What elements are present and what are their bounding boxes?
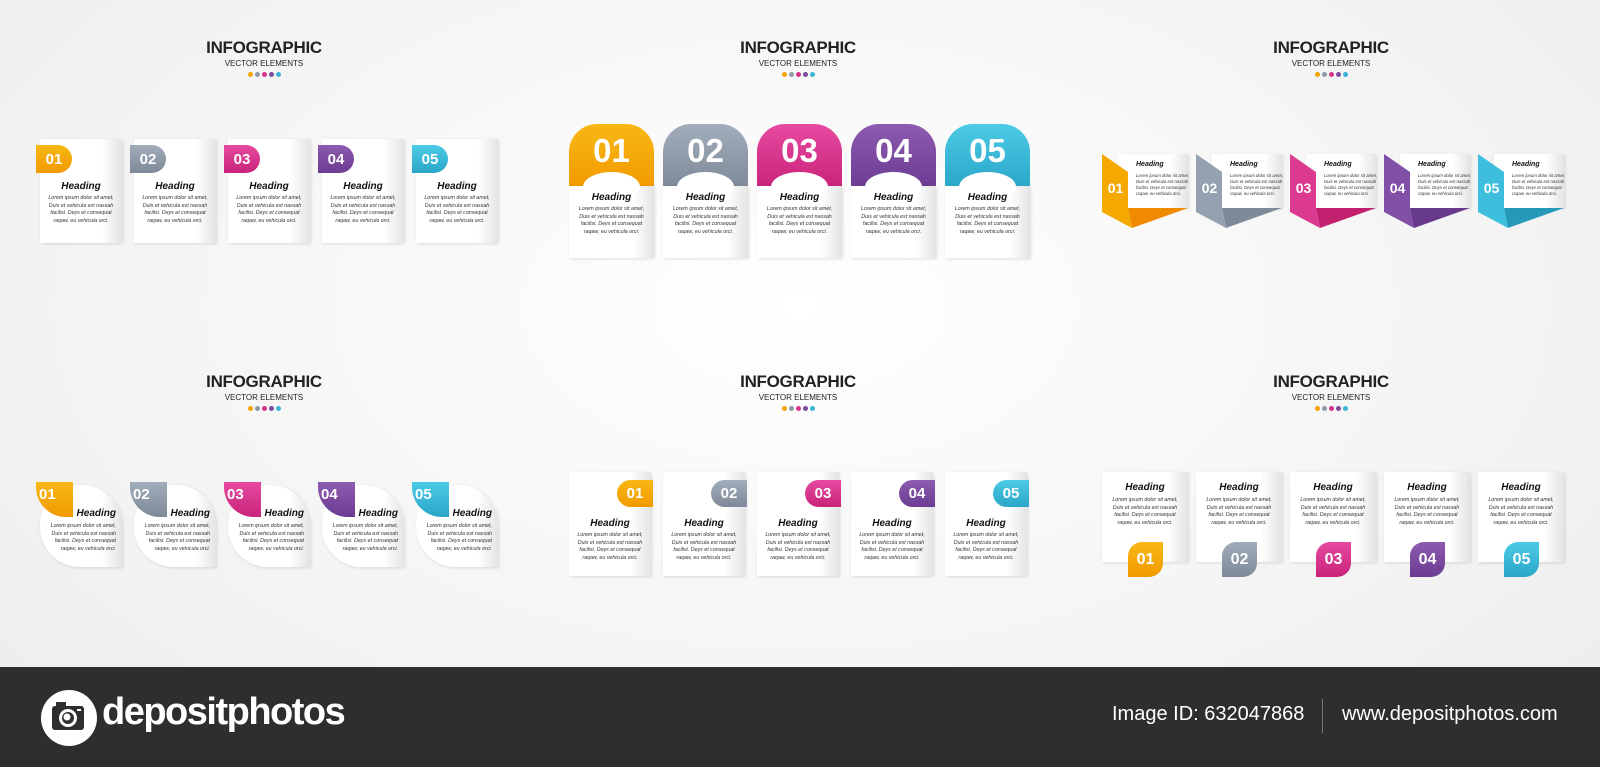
card 02 [134, 139, 216, 243]
card 03: facilisi. Deys et consequat [243, 538, 304, 544]
card 02 [664, 472, 747, 578]
card 01: Lorem ipsum dolor sit amet, [51, 523, 116, 529]
card 02: facilisi. Deys et consequat [149, 538, 210, 544]
title: panel 1: VECTOR ELEMENTS [225, 59, 303, 68]
card 02: Heading [171, 508, 210, 519]
card 04 [1384, 154, 1472, 228]
card 02: 02 [687, 132, 724, 169]
card 03: 03 [1325, 550, 1342, 568]
card 05 [1478, 472, 1566, 577]
card 01: facilisi. Deys et consequat [1114, 512, 1176, 518]
card 04: Duis et vehicula est nassah [1418, 179, 1470, 184]
card 05 [412, 482, 500, 569]
card 02: Heading [155, 181, 195, 192]
card 03: Heading [265, 508, 304, 519]
card 02: Duis et vehicula est nassah [673, 214, 738, 220]
panel 6: cards with bottom leaf badges [1102, 472, 1566, 577]
card 03: facilisi. Deys et consequat [769, 221, 830, 227]
card 02: facilisi. Deys et consequat [144, 210, 206, 216]
card 04: Duis et vehicula est nassah [334, 530, 398, 536]
icon: camera logo [41, 690, 97, 746]
card 05: facilisi. Deys et consequat [426, 210, 488, 216]
tab 01: 01 [46, 150, 62, 168]
tab 03: 03 [234, 150, 250, 168]
card 02: Lorem ipsum dolor sit amet, [142, 195, 208, 201]
card 03: Heading [1313, 482, 1353, 493]
card 01: facilisi. Deys et consequat [55, 538, 116, 544]
card 05: raqaw, eu vehicula orci. [437, 546, 492, 552]
title: panel 1: INFOGRAPHIC [206, 38, 322, 57]
card 05: facilisi. Deys et consequat [1512, 185, 1562, 190]
card 02: Duis et vehicula est nassah [1207, 504, 1271, 510]
card 03: Lorem ipsum dolor sit amet, [239, 523, 304, 529]
card 04: raqaw, eu vehicula orci. [864, 554, 920, 560]
card 02: 02 [1231, 550, 1248, 568]
card 02: raqaw, eu vehicula orci. [1230, 191, 1275, 196]
card 04: raqaw, eu vehicula orci. [335, 218, 391, 224]
card 04: raqaw, eu vehicula orci. [1399, 520, 1455, 526]
card 05: Duis et vehicula est nassah [1512, 179, 1564, 184]
card 05: 05 [1484, 180, 1499, 196]
card 02: Duis et vehicula est nassah [1230, 179, 1282, 184]
card 05: Lorem ipsum dolor sit amet, [955, 206, 1020, 212]
card 04: Heading [1407, 482, 1447, 493]
panel 2: dome cards [569, 124, 1032, 260]
card 04: Heading [1418, 161, 1446, 168]
card 04: facilisi. Deys et consequat [1396, 512, 1458, 518]
card 03: Lorem ipsum dolor sit amet, [1300, 497, 1366, 503]
card 04 [1384, 472, 1472, 577]
card 03: raqaw, eu vehicula orci. [241, 218, 297, 224]
card 01: raqaw, eu vehicula orci. [61, 546, 116, 552]
card 02: 02 [1202, 180, 1217, 196]
card 04: raqaw, eu vehicula orci. [866, 228, 921, 234]
card 03: raqaw, eu vehicula orci. [249, 546, 304, 552]
card 04: Lorem ipsum dolor sit amet, [330, 195, 396, 201]
title: panel 6: VECTOR ELEMENTS [1292, 393, 1370, 402]
card 01: Lorem ipsum dolor sit amet, [579, 206, 644, 212]
card 03: Lorem ipsum dolor sit amet, [765, 532, 831, 538]
card 02: Lorem ipsum dolor sit amet, [1206, 497, 1272, 503]
card 02: raqaw, eu vehicula orci. [1211, 520, 1267, 526]
card 05: Duis et vehicula est nassah [425, 202, 489, 208]
card 01: Duis et vehicula est nassah [578, 540, 642, 546]
card 02: Heading [684, 518, 724, 529]
card 04: Lorem ipsum dolor sit amet, [861, 206, 926, 212]
card 04: Heading [343, 181, 383, 192]
card 03: Duis et vehicula est nassah [237, 202, 301, 208]
title: panel 4: VECTOR ELEMENTS [225, 393, 303, 402]
tab 05: 05 [422, 150, 438, 168]
panel 4: rounded cards with corner flags [36, 482, 500, 569]
card 04: Duis et vehicula est nassah [1395, 504, 1459, 510]
card 03 [1290, 154, 1378, 228]
card 03: 03 [815, 485, 831, 502]
card 04: raqaw, eu vehicula orci. [343, 546, 398, 552]
tab 02 [130, 145, 166, 173]
card 04: Lorem ipsum dolor sit amet, [333, 523, 398, 529]
card 03: raqaw, eu vehicula orci. [770, 554, 826, 560]
card 05 [416, 139, 498, 243]
card 03: facilisi. Deys et consequat [1302, 512, 1364, 518]
card 05: raqaw, eu vehicula orci. [1512, 191, 1557, 196]
title: panel 6: INFOGRAPHIC [1273, 372, 1389, 391]
card 04: Duis et vehicula est nassah [860, 540, 924, 546]
tab 03 [224, 145, 260, 173]
brand name: depositphotos [102, 691, 344, 733]
card 03: facilisi. Deys et consequat [767, 547, 829, 553]
card 01: raqaw, eu vehicula orci. [1117, 520, 1173, 526]
card 01: raqaw, eu vehicula orci. [1136, 191, 1181, 196]
card 02: facilisi. Deys et consequat [675, 221, 736, 227]
card 01: Heading [61, 181, 101, 192]
card 02: facilisi. Deys et consequat [1208, 512, 1270, 518]
card 03: facilisi. Deys et consequat [1324, 185, 1374, 190]
card 05 [946, 472, 1029, 578]
card 01: 01 [593, 132, 630, 169]
title: panel 5 [740, 372, 856, 411]
card 01: Heading [1125, 482, 1165, 493]
card 01: Lorem ipsum dolor sit amet, [48, 195, 114, 201]
card 05: 05 [415, 486, 432, 503]
title: panel 2: INFOGRAPHIC [740, 38, 856, 57]
card 01: facilisi. Deys et consequat [581, 221, 642, 227]
card 05: Heading [968, 192, 1007, 203]
card 04 [318, 482, 406, 569]
card 02: Lorem ipsum dolor sit amet, [673, 206, 738, 212]
card 05: facilisi. Deys et consequat [955, 547, 1017, 553]
card 03 [1290, 472, 1378, 577]
title: panel 1 [206, 38, 322, 77]
card 03 [224, 482, 312, 569]
title: panel 3: VECTOR ELEMENTS [1292, 59, 1370, 68]
card 02: Heading [1219, 482, 1259, 493]
card 02: Heading [1230, 161, 1258, 168]
card 01: Duis et vehicula est nassah [1136, 179, 1188, 184]
card 02: Duis et vehicula est nassah [143, 202, 207, 208]
tab 02: 02 [140, 150, 156, 168]
card 03: Heading [1324, 161, 1352, 168]
card 05: facilisi. Deys et consequat [957, 221, 1018, 227]
card 01: Duis et vehicula est nassah [49, 202, 113, 208]
card 05: Lorem ipsum dolor sit amet, [1512, 173, 1565, 178]
card 04: Heading [872, 518, 912, 529]
card 01: raqaw, eu vehicula orci. [53, 218, 109, 224]
card 03: raqaw, eu vehicula orci. [772, 228, 827, 234]
card 01: Duis et vehicula est nassah [1113, 504, 1177, 510]
card 02 [130, 482, 218, 569]
title: panel 3 [1273, 38, 1389, 77]
card 04: Heading [359, 508, 398, 519]
card 03: 03 [1296, 180, 1311, 196]
card 02: Lorem ipsum dolor sit amet, [145, 523, 210, 529]
card 02: facilisi. Deys et consequat [1230, 185, 1280, 190]
card 01 [1102, 154, 1190, 228]
card 04: facilisi. Deys et consequat [337, 538, 398, 544]
card 04 [851, 124, 938, 260]
card 02: Heading [686, 192, 725, 203]
card 04: Heading [874, 192, 913, 203]
card 04: Duis et vehicula est nassah [331, 202, 395, 208]
card 01: facilisi. Deys et consequat [50, 210, 112, 216]
card 04: facilisi. Deys et consequat [332, 210, 394, 216]
image id: Image ID: 632047868 [1112, 703, 1304, 725]
panel 3: folded cards [1102, 154, 1566, 228]
card 01 [1102, 472, 1190, 577]
card 03 [228, 139, 310, 243]
card 05: Lorem ipsum dolor sit amet, [427, 523, 492, 529]
card 01: 01 [1137, 550, 1154, 568]
card 01: Lorem ipsum dolor sit amet, [577, 532, 643, 538]
card 01: facilisi. Deys et consequat [579, 547, 641, 553]
card 02 [1196, 154, 1284, 228]
card 04: 04 [875, 132, 912, 169]
card 05: raqaw, eu vehicula orci. [1493, 520, 1549, 526]
card 02: Lorem ipsum dolor sit amet, [671, 532, 737, 538]
title: panel 4: INFOGRAPHIC [206, 372, 322, 391]
card 04: 04 [321, 486, 338, 503]
card 01: 01 [627, 485, 643, 502]
card 01: Duis et vehicula est nassah [52, 530, 116, 536]
card 05 [945, 124, 1032, 260]
card 01 [569, 124, 656, 260]
card 03: 03 [227, 486, 244, 503]
card 05: raqaw, eu vehicula orci. [429, 218, 485, 224]
footer bar [0, 667, 1600, 767]
card 05: Heading [1512, 161, 1540, 168]
title: panel 3: INFOGRAPHIC [1273, 38, 1389, 57]
card 01 [569, 472, 653, 578]
card 05: Duis et vehicula est nassah [428, 530, 492, 536]
card 03: raqaw, eu vehicula orci. [1305, 520, 1361, 526]
card 01: raqaw, eu vehicula orci. [582, 554, 638, 560]
card 04: 04 [1390, 180, 1405, 196]
card 03: Heading [249, 181, 289, 192]
card 05: facilisi. Deys et consequat [431, 538, 492, 544]
card 01: Lorem ipsum dolor sit amet, [1112, 497, 1178, 503]
card 05: Heading [1501, 482, 1541, 493]
card 03: Heading [780, 192, 819, 203]
card 03: Duis et vehicula est nassah [1301, 504, 1365, 510]
card 01: Heading [77, 508, 116, 519]
card 03: Duis et vehicula est nassah [240, 530, 304, 536]
card 04: Lorem ipsum dolor sit amet, [859, 532, 925, 538]
card 05: Duis et vehicula est nassah [1489, 504, 1553, 510]
card 02: Duis et vehicula est nassah [672, 540, 736, 546]
card 03: 03 [781, 132, 818, 169]
title: panel 5: INFOGRAPHIC [740, 372, 856, 391]
title: panel 4 [206, 372, 322, 411]
card 05 [1478, 154, 1566, 228]
card 02: raqaw, eu vehicula orci. [155, 546, 210, 552]
card 03: raqaw, eu vehicula orci. [1324, 191, 1369, 196]
card 05: Heading [437, 181, 477, 192]
card 04: facilisi. Deys et consequat [861, 547, 923, 553]
card 05: Duis et vehicula est nassah [954, 540, 1018, 546]
card 01: 01 [1108, 180, 1123, 196]
card 03: Heading [778, 518, 818, 529]
card 02: raqaw, eu vehicula orci. [676, 554, 732, 560]
card 03: Lorem ipsum dolor sit amet, [236, 195, 302, 201]
card 01: 01 [39, 486, 56, 503]
card 03: Lorem ipsum dolor sit amet, [1324, 173, 1377, 178]
card 02 [1196, 472, 1284, 577]
card 02: Lorem ipsum dolor sit amet, [1230, 173, 1283, 178]
card 05: Heading [966, 518, 1006, 529]
card 03: Lorem ipsum dolor sit amet, [767, 206, 832, 212]
card 01 [40, 139, 122, 243]
card 03 [757, 124, 844, 260]
card 01: Lorem ipsum dolor sit amet, [1136, 173, 1189, 178]
tab 01 [36, 145, 72, 173]
card 05: facilisi. Deys et consequat [1490, 512, 1552, 518]
card 01 [36, 482, 124, 569]
card 01: Heading [590, 518, 630, 529]
card 04: Lorem ipsum dolor sit amet, [1394, 497, 1460, 503]
card 01: Duis et vehicula est nassah [579, 214, 644, 220]
panel 5: cards with right tabs [569, 472, 1029, 578]
card 04 [852, 472, 935, 578]
tab 04: 04 [328, 150, 344, 168]
card 05: Lorem ipsum dolor sit amet, [953, 532, 1019, 538]
card 05: 05 [1003, 485, 1019, 502]
card 04: facilisi. Deys et consequat [863, 221, 924, 227]
card 01: facilisi. Deys et consequat [1136, 185, 1186, 190]
card 02: raqaw, eu vehicula orci. [147, 218, 203, 224]
card 04: Lorem ipsum dolor sit amet, [1418, 173, 1471, 178]
card 02: 02 [133, 486, 150, 503]
card 03: Duis et vehicula est nassah [1324, 179, 1376, 184]
card 04: 04 [909, 485, 925, 502]
card 01: Heading [1136, 161, 1164, 168]
card 03: facilisi. Deys et consequat [238, 210, 300, 216]
card 02: facilisi. Deys et consequat [673, 547, 735, 553]
tab 04 [318, 145, 354, 173]
card 04: 04 [1419, 550, 1436, 568]
title: panel 2: VECTOR ELEMENTS [759, 59, 837, 68]
title: panel 6 [1273, 372, 1389, 411]
card 05: Lorem ipsum dolor sit amet, [1488, 497, 1554, 503]
title: panel 2 [740, 38, 856, 77]
card 01: raqaw, eu vehicula orci. [584, 228, 639, 234]
card 05: raqaw, eu vehicula orci. [958, 554, 1014, 560]
card 04: raqaw, eu vehicula orci. [1418, 191, 1463, 196]
card 05: Heading [453, 508, 492, 519]
card 04: facilisi. Deys et consequat [1418, 185, 1468, 190]
card 01: Heading [592, 192, 631, 203]
card 02 [663, 124, 750, 260]
card 05: Lorem ipsum dolor sit amet, [424, 195, 490, 201]
card 04: Duis et vehicula est nassah [861, 214, 926, 220]
card 04 [322, 139, 404, 243]
card 02: raqaw, eu vehicula orci. [678, 228, 733, 234]
card 02: 02 [721, 485, 737, 502]
card 03: Duis et vehicula est nassah [767, 214, 832, 220]
card 03 [758, 472, 841, 578]
card 05: raqaw, eu vehicula orci. [960, 228, 1015, 234]
card 05: 05 [1513, 550, 1530, 568]
card 05: Duis et vehicula est nassah [955, 214, 1020, 220]
panel 1: tab cards [36, 139, 500, 245]
title: panel 5: VECTOR ELEMENTS [759, 393, 837, 402]
tab 05 [412, 145, 448, 173]
card 05: 05 [969, 132, 1006, 169]
card 02: Duis et vehicula est nassah [146, 530, 210, 536]
website url: www.depositphotos.com [1342, 703, 1558, 725]
card 03: Duis et vehicula est nassah [766, 540, 830, 546]
